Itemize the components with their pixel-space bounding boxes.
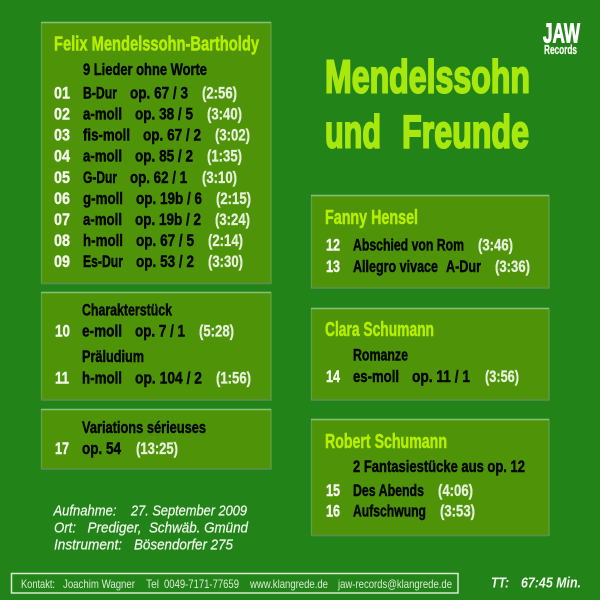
track 04: op. 85 / 2 (135, 146, 193, 166)
panel: Clara Schumann (311, 308, 549, 400)
track 15: (4:06) (438, 481, 473, 500)
recording details (53, 504, 249, 554)
contact box: jaw-records@klangrede.de (337, 577, 452, 591)
logo: JAW Records: Records (544, 43, 577, 57)
subheading: Präludium: Präludium (82, 347, 144, 366)
panel: Fanny Hensel (311, 196, 549, 288)
heading: composer: Clara Schumann (325, 319, 434, 341)
total time: TT: (491, 576, 509, 592)
track 17: op. 54 (82, 439, 122, 458)
track 04: (1:35) (207, 146, 242, 166)
track 10: (5:28) (199, 322, 234, 341)
subheading: 2 Fantasiestücke: 2 Fantasiestücke aus op. 12 (353, 457, 525, 476)
title: und (325, 106, 381, 158)
track 02: 02 (54, 104, 70, 123)
track 03 (54, 125, 250, 144)
track 13 (326, 257, 530, 276)
track 07: 07 (54, 210, 70, 229)
title: Freunde (402, 106, 529, 158)
subheading: Variations sérieuses: Variations sérieuses (82, 418, 206, 437)
track 10: 10 (55, 322, 70, 341)
track 04: 04 (54, 146, 71, 166)
total time (491, 576, 581, 592)
title (325, 51, 530, 158)
track 02 (54, 104, 242, 123)
track 09: (3:30) (208, 252, 243, 271)
track 12: 12 (326, 236, 340, 255)
track 16: 16 (326, 502, 340, 521)
track 02: a-moll (83, 104, 122, 123)
track 05: op. 62 / 1 (130, 168, 187, 187)
contact box: Tel (146, 577, 159, 591)
track 02: (3:40) (207, 104, 242, 123)
track 15: 15 (326, 481, 340, 500)
contact box: Joachim Wagner (63, 577, 135, 591)
track 16 (326, 502, 475, 521)
track 12: (3:46) (478, 236, 513, 255)
panel: Felix Mendelssohn-Bartholdy (41, 22, 271, 284)
track 07: op. 19b / 2 (135, 210, 201, 229)
panel: Robert Schumann (311, 420, 549, 536)
track 08: (2:14) (208, 231, 243, 250)
track 01: B-Dur (83, 83, 117, 102)
track 11: 11 (55, 369, 69, 388)
track 16: Aufschwung (353, 502, 426, 521)
track 05 (54, 168, 237, 187)
track 17: 17 (55, 439, 69, 458)
track 11: op. 104 / 2 (135, 369, 202, 388)
track 04 (54, 146, 242, 166)
subheading: Romanze: Romanze (353, 346, 408, 365)
track 14: op. 11 / 1 (412, 367, 470, 386)
recording details: Instrument: (54, 538, 122, 554)
contact box: www.klangrede.de (249, 577, 328, 591)
logo: JAW Records (543, 18, 580, 57)
track 14: (3:56) (485, 367, 519, 386)
track 11: (1:56) (216, 369, 251, 388)
track 06: 06 (54, 189, 70, 208)
track 08: op. 67 / 5 (136, 231, 194, 250)
track 05: G-Dur (83, 168, 117, 187)
contact box: Kontakt: (21, 577, 55, 591)
track 15 (326, 481, 473, 500)
track 08 (54, 231, 243, 250)
track 13: (3:36) (495, 257, 530, 276)
track 17: (13:25) (136, 439, 178, 458)
recording details: Aufnahme: (53, 504, 116, 520)
track 03: op. 67 / 2 (143, 125, 201, 144)
track 02: op. 38 / 5 (135, 104, 193, 123)
subheading: 9 Lieder ohne Worte: 9 Lieder ohne Worte (83, 60, 207, 79)
track 10: e-moll (82, 322, 122, 341)
track 09: op. 53 / 2 (136, 252, 194, 271)
recording details: Bösendorfer 275 (134, 538, 234, 554)
track 01: op. 67 / 3 (130, 83, 188, 102)
track 01 (54, 83, 237, 102)
heading: composer: Robert Schumann (325, 431, 447, 453)
track 05: 05 (54, 168, 70, 187)
track 03: 03 (54, 125, 70, 144)
recording details: Schwäb. Gmünd (149, 520, 249, 536)
track 05: (3:10) (202, 168, 237, 187)
total time: 67:45 Min. (521, 576, 581, 592)
recording details: Ort: (54, 520, 76, 536)
track 11 (55, 369, 251, 388)
track 03: fis-moll (83, 125, 130, 144)
track 01: 01 (54, 83, 70, 102)
panel: Charakterstück and Präludium (41, 292, 271, 400)
track 09 (54, 252, 243, 271)
track 03: (3:02) (215, 125, 250, 144)
heading: composer: Fanny Hensel (325, 207, 418, 229)
track 12: Abschied von Rom (353, 236, 464, 255)
track 10: op. 7 / 1 (135, 322, 185, 341)
track 09: Es-Dur (83, 252, 123, 271)
track 06: op. 19b / 6 (136, 189, 202, 208)
track 14: 14 (326, 367, 340, 386)
contact box: 0049-7171-77659 (164, 577, 239, 591)
track 08: 08 (54, 231, 70, 250)
contact box (12, 574, 458, 593)
heading: composer: Felix Mendelssohn-Bartholdy (54, 34, 260, 56)
track 10 (55, 322, 234, 341)
track 13: Allegro vivace (353, 257, 438, 276)
track 13: 13 (326, 257, 340, 276)
track 17 (55, 439, 178, 458)
panel: Variations sérieuses (41, 410, 271, 469)
track 16: (3:53) (440, 502, 475, 521)
track 11: h-moll (82, 369, 122, 388)
recording details: Prediger, (88, 520, 142, 536)
track 04: a-moll (83, 146, 122, 166)
track 01: (2:56) (202, 83, 237, 102)
track 07: a-moll (83, 210, 122, 229)
track 06: g-moll (83, 189, 123, 208)
track 14: es-moll (353, 367, 399, 386)
track 09: 09 (54, 252, 70, 271)
subheading: Charakterstück: Charakterstück (82, 301, 172, 320)
track 07: (3:24) (215, 210, 250, 229)
track 14 (326, 367, 519, 386)
track 06 (54, 189, 251, 208)
track 15: Des Abends (353, 481, 424, 500)
recording details: 27. September 2009 (130, 504, 247, 520)
track 13: A-Dur (446, 257, 481, 276)
track 06: (2:15) (216, 189, 251, 208)
track 08: h-moll (83, 231, 123, 250)
track 07 (54, 210, 250, 229)
